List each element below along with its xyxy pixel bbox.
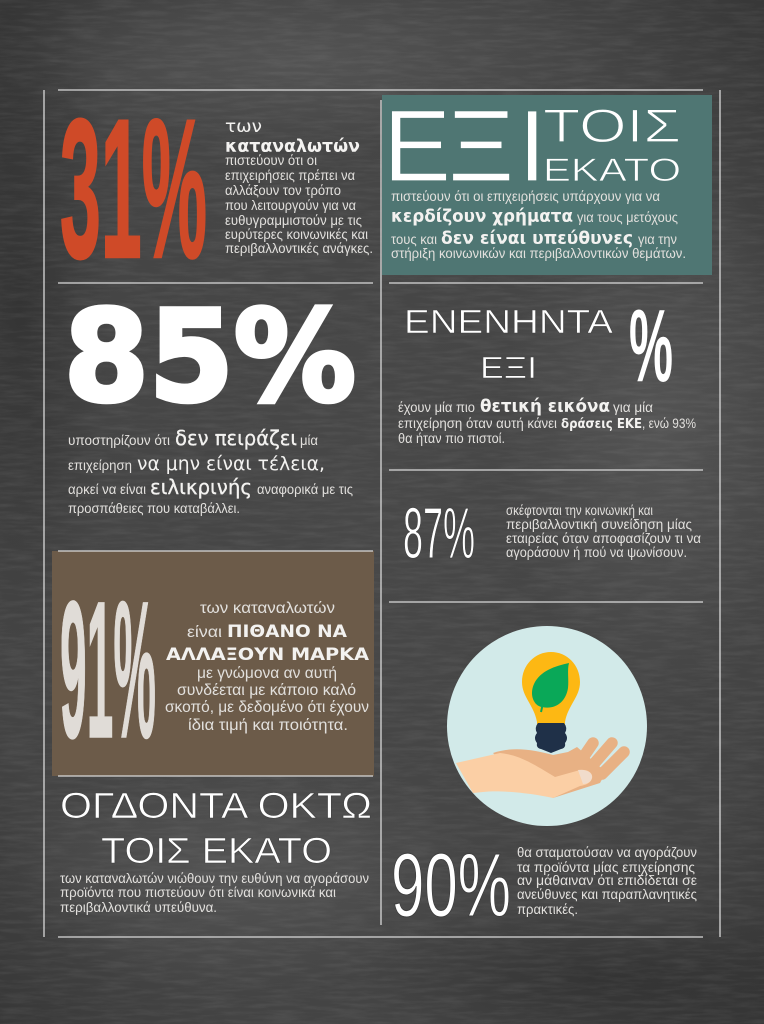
- text: 96% description: [398, 396, 696, 446]
- text: 31% description: [225, 117, 373, 256]
- text: 90% description: αν μάθαιναν ότι επιδίδεται σε: [517, 872, 697, 888]
- stat: 88 percent: [60, 785, 372, 915]
- text: 96% description: θα ήταν πιο πιστοί.: [398, 430, 505, 446]
- text: 90% description: πρακτικές.: [517, 901, 578, 917]
- number: 90%: 90%: [391, 836, 511, 936]
- text: 85% description: επιχείρηση: [68, 457, 132, 473]
- stat: 87 percent: [403, 494, 701, 574]
- stat: 90 percent: [391, 836, 697, 936]
- text: 85% description: αρκεί να είναι: [68, 481, 146, 497]
- text: 90% description: [517, 844, 697, 917]
- text: 91% description: ίδια τιμή και ποιότητα.: [188, 717, 348, 734]
- text: 91% description: των καταναλωτών: [200, 600, 335, 617]
- text: 91% description: είναι: [187, 624, 222, 641]
- heading: ΕΞΙ ΤΟΙΣ ΕΚΑΤΟ: ΕΚΑΤΟ: [543, 152, 681, 188]
- text: 91% description: ΠΙΘΑΝΟ ΝΑ: [227, 622, 348, 642]
- text: 87% description: περιβαλλοντική συνείδηση μίας: [506, 516, 692, 532]
- text: 31% description: ευρύτερες κοινωνικές και: [225, 226, 368, 242]
- stat: 91 percent brown panel: 91%: [60, 561, 156, 779]
- icon: bulb: [522, 652, 580, 753]
- text: six percent description: στήριξη κοινωνικών και περιβαλλοντικών θεμάτων.: [391, 245, 686, 261]
- text: 88% description: [60, 870, 369, 915]
- text: 85% description: ειλικρινής: [150, 475, 252, 499]
- number: 85%: 85%: [64, 283, 356, 430]
- text: 90% description: ανεύθυνες και παραπλανητικές: [517, 886, 697, 902]
- text: 91% description: με γνώμονα αν αυτή: [197, 665, 337, 682]
- stat: 85 percent: [64, 283, 356, 516]
- text: 85% description: αναφορικά με τις: [257, 481, 353, 497]
- panel: teal background: [382, 95, 712, 275]
- text: six percent description: για τους μετόχους: [577, 209, 678, 225]
- text: 96% description: για μία: [613, 399, 653, 415]
- icon: leaf: [532, 663, 569, 712]
- heading: ΕΝΕΝΗΝΤΑ ΕΞΙ %: ΕΝΕΝΗΝΤΑ: [404, 303, 613, 340]
- text: 85% description: προσπάθειες που καταβάλλει.: [68, 500, 240, 516]
- stat: 96 percent: [398, 288, 696, 446]
- text: 90% description: τα προϊόντα μίας επιχείρησης: [517, 859, 695, 875]
- icon: hand: [456, 743, 624, 798]
- heading: ΕΝΕΝΗΝΤΑ ΕΞΙ %: [404, 288, 673, 403]
- text: 31% description: που λειτουργούν για να: [225, 197, 356, 213]
- text: six percent description: για την: [638, 231, 677, 247]
- text: 88% description: των καταναλωτών νιώθουν την ευθύνη να αγοράσουν: [60, 870, 369, 886]
- text: 85% description: υποστηρίζουν ότι: [68, 432, 170, 448]
- text: 91% description: συνδέεται με κάποιο καλό: [177, 682, 356, 699]
- heading: ΕΞΙ ΤΟΙΣ ΕΚΑΤΟ: [383, 89, 681, 203]
- text: 96% description: δράσεις ΕΚΕ: [561, 417, 642, 432]
- text: 31% description: περιβαλλοντικές ανάγκες.: [225, 240, 373, 256]
- text: six percent description: πιστεύουν ότι οι επιχειρήσεις υπάρχουν για να: [391, 188, 660, 204]
- panel: brown background: [52, 551, 374, 776]
- text: 85% description: δεν πειράζει: [175, 426, 297, 450]
- stat: 87 percent: 87%: [403, 494, 475, 574]
- text: 87% description: [506, 502, 701, 560]
- text: 87% description: σκέφτονται την κοινωνική και: [506, 502, 653, 518]
- text: 88% description: προϊόντα που πιστεύουν ότι είναι κοινωνικά και: [60, 884, 336, 900]
- text: 96% description: επιχείρηση όταν αυτή κάνει: [398, 415, 557, 431]
- text: 31% description: επιχειρήσεις πρέπει να: [225, 167, 355, 183]
- frame lines: [44, 90, 720, 937]
- text: 96% description: έχουν μία πιο: [398, 399, 475, 415]
- text: 87% description: εταιρείας όταν αποφασίζουν τι να: [506, 530, 701, 546]
- text: 31% description: των: [225, 117, 262, 137]
- stat: 31 percent: 31%: [60, 78, 207, 299]
- text: 90% description: θα σταματούσαν να αγοράζουν: [517, 844, 697, 860]
- circle background: [447, 626, 647, 826]
- heading: ΟΓΔΟΝΤΑ ΟΚΤΩ ΤΟΙΣ ΕΚΑΤΟ: ΟΓΔΟΝΤΑ ΟΚΤΩ: [60, 785, 372, 826]
- text: six percent description: δεν είναι υπεύθυνες: [441, 228, 633, 249]
- text: 87% description: αγοράσουν ή πού να ψωνίσουν.: [506, 544, 687, 560]
- text: 91% description: ΑΛΛΑΞΟΥΝ ΜΑΡΚΑ: [166, 645, 370, 665]
- text: six percent description: κερδίζουν χρήματα: [391, 206, 573, 227]
- text: 88% description: περιβαλλοντικά υπεύθυνα.: [60, 899, 217, 915]
- heading: ΕΝΕΝΗΝΤΑ ΕΞΙ %: ΕΞΙ: [480, 350, 537, 385]
- icon: light bulb with leaf on a hand: [447, 626, 647, 826]
- heading: ΕΞΙ ΤΟΙΣ ΕΚΑΤΟ: ΤΟΙΣ: [543, 99, 681, 152]
- text: six percent description: [391, 188, 686, 261]
- text: 31% description: ευθυγραμμιστούν με τις: [225, 212, 362, 228]
- text: six percent description: τους και: [391, 231, 437, 247]
- text: 85% description: να μην είναι τέλεια,: [137, 453, 325, 475]
- text: 96% description: θετική εικόνα: [480, 396, 610, 417]
- text: 91% description: [165, 600, 370, 734]
- text: 85% description: [68, 426, 353, 516]
- heading: ΟΓΔΟΝΤΑ ΟΚΤΩ ΤΟΙΣ ΕΚΑΤΟ: ΤΟΙΣ ΕΚΑΤΟ: [101, 830, 332, 871]
- text: 91% description: σκοπό, με δεδομένο ότι έχουν: [165, 699, 369, 716]
- heading: ΕΞΙ ΤΟΙΣ ΕΚΑΤΟ: ΕΞΙ: [383, 89, 546, 203]
- text: 96% description: , ενώ 93%: [642, 415, 696, 431]
- stat: 96 percent: %: [629, 288, 673, 403]
- heading: ΟΓΔΟΝΤΑ ΟΚΤΩ ΤΟΙΣ ΕΚΑΤΟ: [60, 785, 372, 871]
- text: 31% description: καταναλωτών: [225, 136, 360, 157]
- text: 31% description: πιστεύουν ότι οι: [225, 152, 317, 168]
- stat: six percent teal panel: [383, 89, 686, 261]
- text: 31% description: αλλάξουν τον τρόπο: [225, 182, 341, 198]
- text: 85% description: μία: [300, 432, 318, 448]
